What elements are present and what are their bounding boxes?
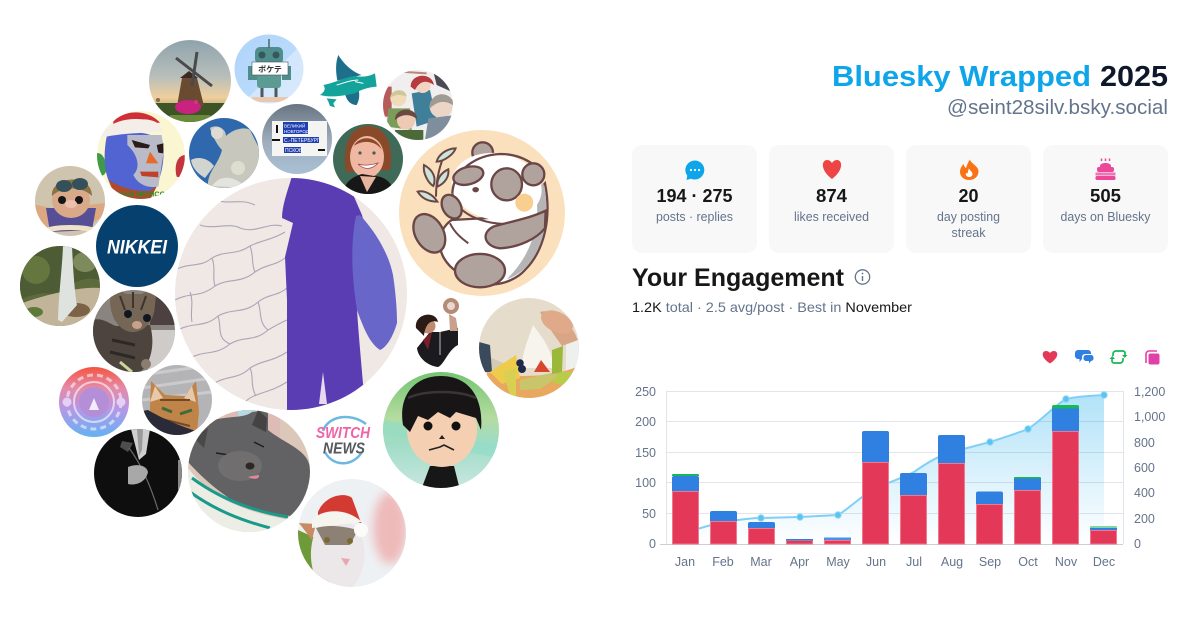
panel: likes received [769,145,894,253]
left axis labels: 200 [635,415,656,429]
month labels: Dec [1093,555,1115,569]
panel: day posting streak: 20 [958,186,978,206]
avatar: robot holding sign [234,34,304,104]
handle: @seint28silv.bsky.social [947,97,1168,119]
avatar: Switch News logo: NEWS [323,440,366,458]
avatar: geyser [20,246,100,326]
avatar: gray cat sticking tongue [188,410,310,545]
icon: birthday cake [1096,158,1116,180]
icon: heart [823,160,841,179]
panel: days on Bluesky: days on Bluesky [1060,210,1151,224]
icon: flame [960,160,979,180]
icon: info [855,270,870,284]
month labels: Apr [790,555,809,569]
right axis labels: 200 [1134,512,1155,526]
panel: avatar bubble cluster [20,34,580,590]
panel: day posting streak [906,145,1031,253]
avatar: panda illustration [399,130,566,297]
month labels: Feb [712,555,734,569]
month labels: Sep [979,555,1001,569]
month labels: Jul [906,555,922,569]
avatar: road sign: С.-ПЕТЕРБУРГ [284,138,320,144]
month labels: Mar [750,555,772,569]
icon: quotes [1146,351,1160,364]
avatar: Switch News logo [316,417,371,463]
cumulative points [758,392,1107,521]
avatar: road sign: ВЕЛИКИЙ [284,122,305,128]
avatar: Mii character [383,372,499,490]
avatar: pig pilot [33,166,105,236]
avatar: cat in santa hat [298,479,407,590]
panel: days on Bluesky [1043,145,1168,253]
avatar: anime characters group [382,70,455,140]
month labels: Jan [675,555,695,569]
left axis labels: 250 [635,385,656,399]
panel: day posting streak: streak [952,226,986,240]
left axis labels: 150 [635,446,656,460]
month labels: Jun [866,555,886,569]
cumulative line [685,395,1104,533]
left axis labels: 100 [635,476,656,490]
panel: posts and replies: posts · replies [656,210,733,224]
month labels: Oct [1018,555,1038,569]
avatar: large shadow on paving bricks [175,176,407,412]
avatar: Nikkei logo [96,205,178,287]
avatar: rainbow radial emblem [59,367,129,437]
engagement summary: 1.2K total · 2.5 avg/post · Best in November [632,299,912,315]
icon: speech bubble [685,160,704,180]
avatar: Nikkei logo: NIKKEI [107,238,168,258]
left axis labels: 0 [649,537,656,551]
chart: monthly engagement [635,385,1165,569]
panel: likes received: likes received [794,210,869,224]
avatar: road sign [262,104,332,174]
cumulative area [685,395,1104,544]
avatar: wrestler mask with santa hat: VIVA MEXICO [118,190,166,199]
avatar: Switch News logo: SWITCH [316,425,371,442]
panel: posts and replies [632,145,757,253]
title: Bluesky Wrapped [832,61,1091,93]
right axis labels: 1,200 [1134,385,1165,399]
icon: reposts [1110,351,1128,363]
heading: your engagement: Your Engagement [632,264,845,292]
avatar: wrestler mask with santa hat [96,111,185,200]
icon: replies [1075,350,1094,364]
avatar: parfait and hands [479,298,580,400]
reposts bars [672,405,1117,528]
avatar: windmill and cosmos [149,40,231,123]
left axis labels: 50 [642,507,656,521]
right axis labels: 1,000 [1134,410,1165,424]
right axis labels: 600 [1134,461,1155,475]
icon: likes [1043,351,1057,364]
month labels: May [826,555,851,569]
month labels [675,555,1115,569]
avatar: road sign: ПСКОВ [285,148,303,154]
panel: posts and replies: 194 · 275 [656,186,732,206]
month labels: Aug [941,555,963,569]
avatar: road sign: НОВГОРОД [284,129,309,134]
right axis labels: 800 [1134,436,1155,450]
avatar: man gesturing with pendulum [416,300,458,367]
avatar: marble statue [189,118,260,190]
chart gridlines [660,391,1124,544]
title: 2025 [1100,61,1168,93]
avatar: smiling woman [333,124,403,196]
avatar: ginger cat peeking [142,365,212,436]
avatar: tabby cat [93,290,175,372]
month labels: Nov [1055,555,1078,569]
right axis labels: 400 [1134,486,1155,500]
replies bars [672,408,1117,540]
panel: likes received: 874 [816,186,847,206]
avatar: robot holding sign: ボケテ [258,64,282,74]
avatar: teal manta ray logo [320,55,377,107]
chart legend icons [1043,350,1160,364]
left axis labels [635,385,656,551]
right axis labels: 0 [1134,537,1141,551]
right axis labels [1134,385,1165,551]
avatar: black suit with rose [94,429,184,517]
panel: day posting streak: day posting [937,210,1000,224]
likes bars [672,432,1116,544]
panel: days on Bluesky: 505 [1090,186,1121,206]
